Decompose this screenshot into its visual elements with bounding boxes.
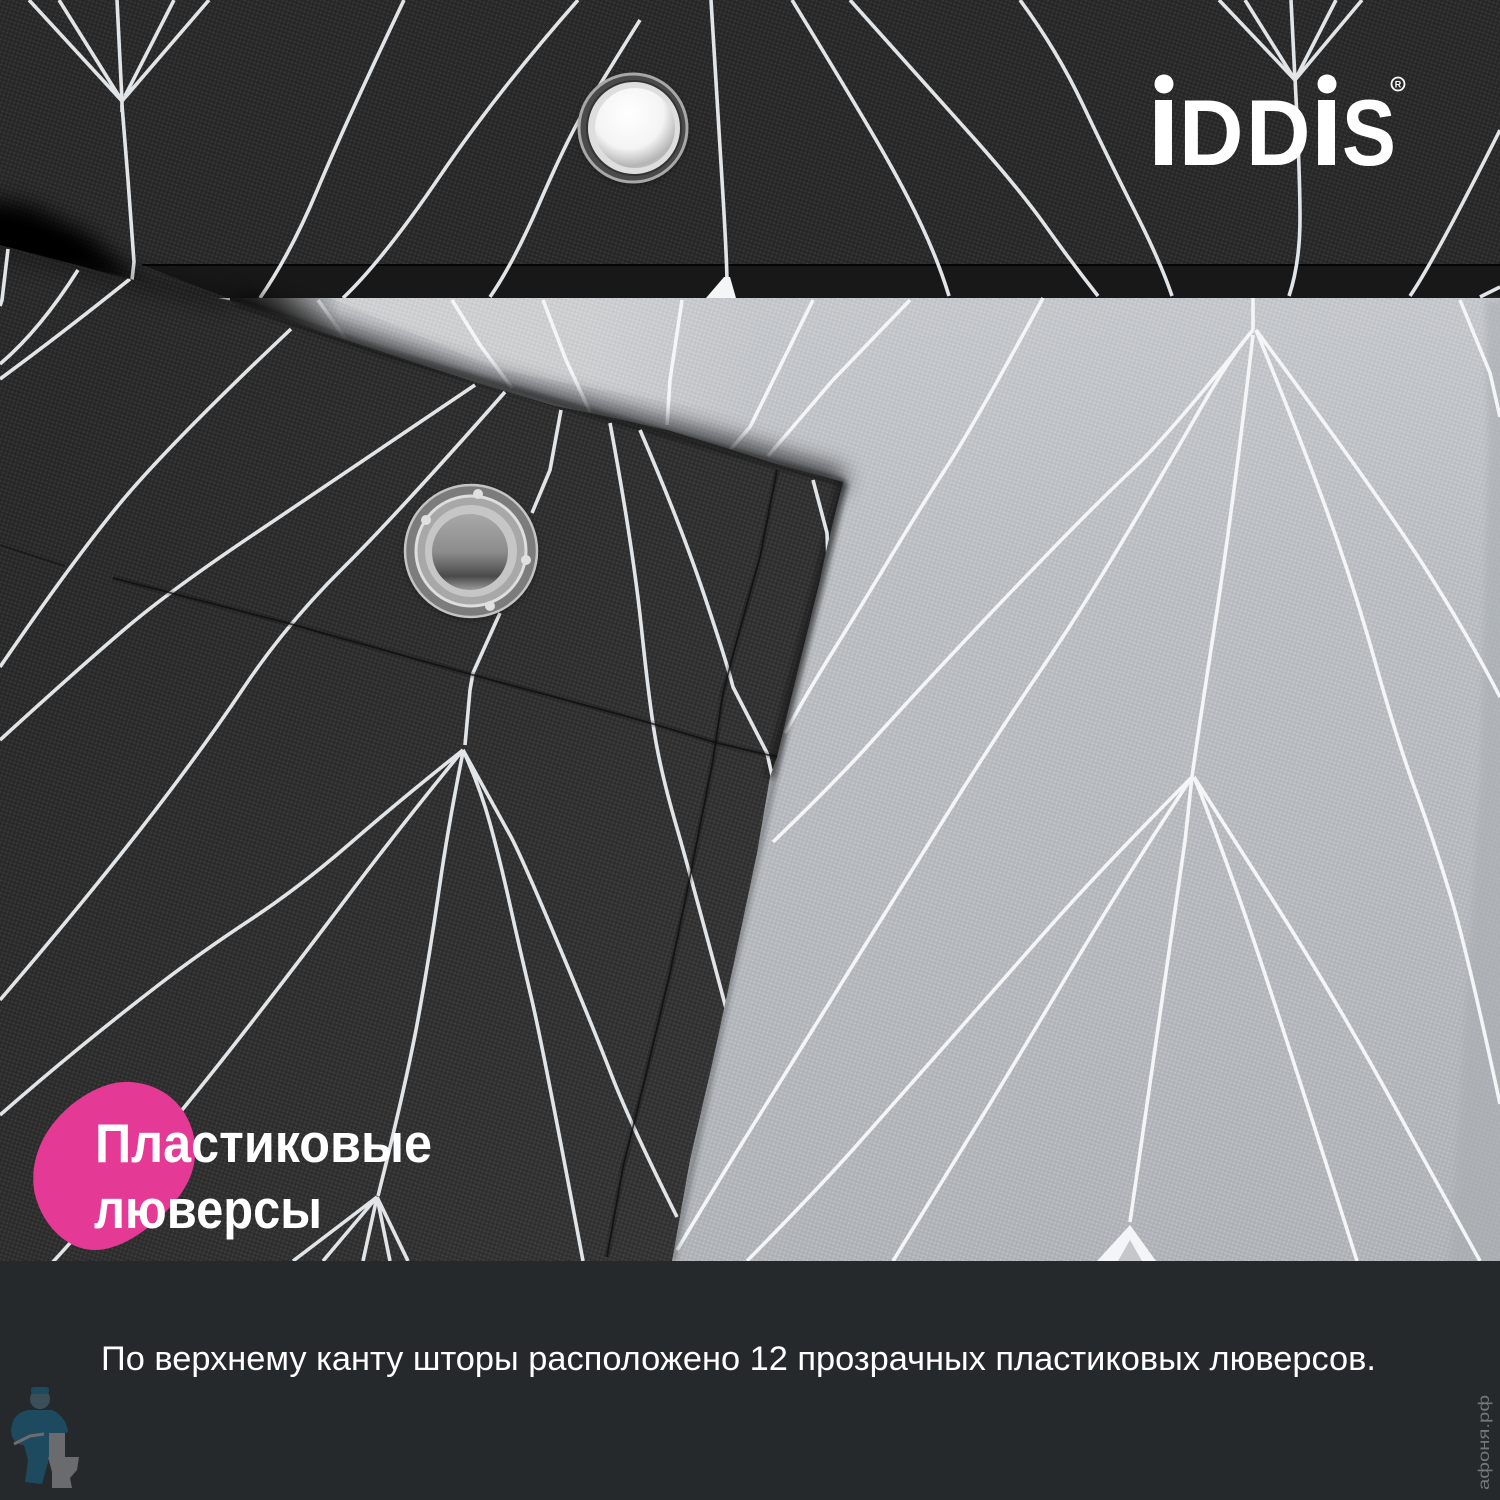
panel: curtain top band [0, 0, 1500, 300]
flap pattern lines [0, 249, 828, 1265]
registered mark [1392, 78, 1404, 90]
panel: bottom description bar [0, 1261, 1500, 1500]
heading [94, 1112, 432, 1240]
panel: front dark curtain flap [0, 245, 843, 1265]
icon: transparent plastic grommet [404, 485, 538, 620]
icon: plumber mascot with toilet [11, 1387, 79, 1488]
light side pattern lines [318, 298, 1500, 1261]
logo: iDDiS: S [1342, 80, 1396, 185]
icon: metal grommet on top band [578, 74, 688, 185]
logo: iDDiS: D [1246, 81, 1310, 186]
heading: люверсы [94, 1178, 322, 1240]
stitching lines [0, 470, 777, 1257]
shadow under flap [240, 302, 843, 1261]
registered mark: R [1395, 80, 1402, 90]
description text: По верхнему канту шторы расположено 12 прозрачных пластиковых люверсов. [101, 1340, 1376, 1378]
watermark: афоня.рф [1476, 1395, 1493, 1490]
pink blob accent [33, 1082, 195, 1250]
logo: iDDiS: i [1146, 55, 1181, 192]
panel: light reverse side of curtain [0, 298, 1500, 1270]
band pattern lines [29, 0, 1500, 298]
logo: iDDiS [1154, 74, 1406, 166]
heading: Пластиковые [95, 1112, 432, 1174]
logo: iDDiS: D [1179, 81, 1243, 186]
logo: iDDiS: i [1310, 55, 1344, 192]
